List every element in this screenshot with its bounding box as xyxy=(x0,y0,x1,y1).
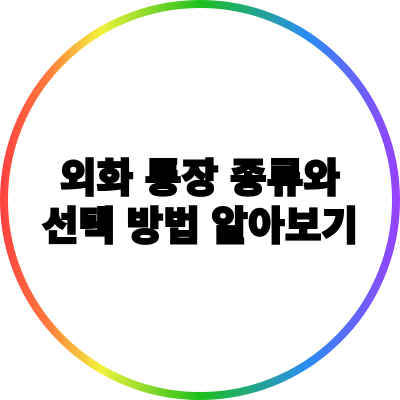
title: 외화 통장 종류와 xyxy=(60,157,340,201)
title: 선택 방법 알아보기 xyxy=(42,205,358,249)
title xyxy=(42,157,358,249)
